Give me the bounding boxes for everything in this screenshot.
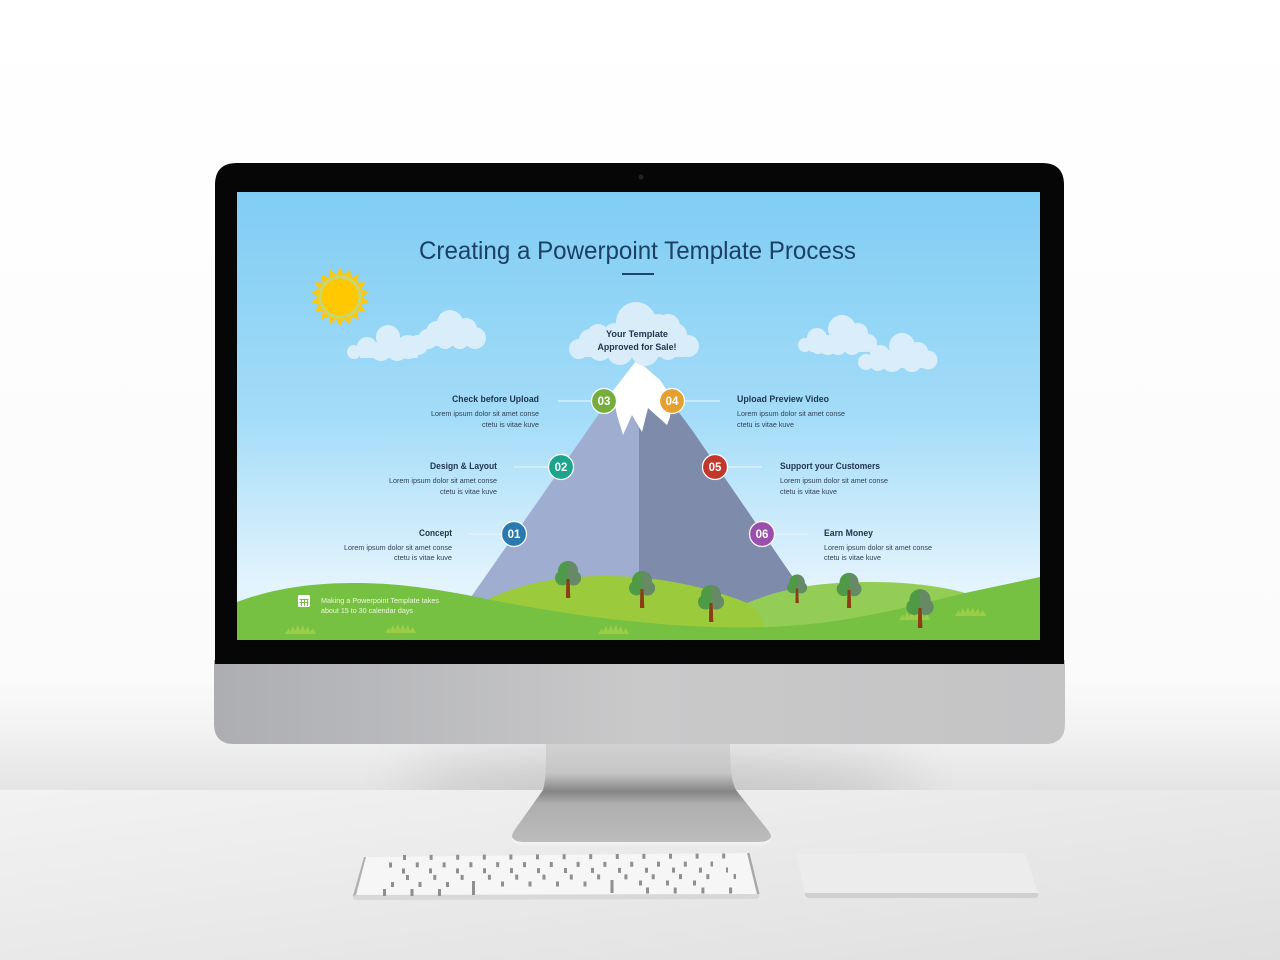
hill: middle <box>490 576 765 630</box>
step 02: Lorem ipsum dolor sit amet conse <box>389 476 497 485</box>
step 03: ctetu is vitae kuve <box>482 420 539 429</box>
grass tufts <box>285 607 986 634</box>
step 04: Lorem ipsum dolor sit amet conse <box>737 409 845 418</box>
cloud: left pair <box>347 310 486 361</box>
sky <box>237 192 1040 640</box>
summit cloud text: Your Template <box>606 329 668 340</box>
icon: sun <box>310 268 370 326</box>
step 05: Support your Customers <box>780 461 880 472</box>
step 05 <box>702 454 888 496</box>
hill: right <box>747 582 965 640</box>
step 04: Upload Preview Video <box>737 394 829 405</box>
step 01: ctetu is vitae kuve <box>394 553 452 562</box>
step 04 <box>660 388 845 429</box>
step 03: Lorem ipsum dolor sit amet conse <box>431 409 539 418</box>
monitor chin <box>214 660 1065 744</box>
duration note <box>321 596 439 615</box>
step 03: 03 <box>598 396 610 408</box>
step 01 <box>344 522 526 562</box>
step 02: 02 <box>555 462 567 474</box>
step 04: 04 <box>666 396 679 408</box>
cloud: summit: Approved for Sale! <box>598 342 676 353</box>
snow cap <box>612 361 672 435</box>
step 06 <box>750 522 932 562</box>
trees <box>555 561 934 628</box>
wall shadow behind stand <box>412 744 908 790</box>
step 02: Design & Layout <box>430 461 498 472</box>
monitor <box>214 163 1065 744</box>
step 01: Lorem ipsum dolor sit amet conse <box>344 543 452 552</box>
step 02 <box>389 454 574 496</box>
step 04: ctetu is vitae kuve <box>737 420 794 429</box>
step 01: 01 <box>508 529 521 541</box>
mountain left face <box>441 361 639 640</box>
step 03 <box>431 388 616 429</box>
title underline <box>622 273 654 275</box>
trackpad <box>797 853 1038 898</box>
icon: calendar <box>298 595 310 607</box>
step 05: Lorem ipsum dolor sit amet conse <box>780 476 888 485</box>
step 05: 05 <box>709 462 722 474</box>
step 01: Concept <box>419 528 453 539</box>
step 05: ctetu is vitae kuve <box>780 487 837 496</box>
desk surface <box>0 790 1280 960</box>
cloud: right pair <box>798 315 938 372</box>
camera <box>638 174 644 180</box>
duration note: about 15 to 30 calendar days <box>321 606 413 615</box>
step 03: Check before Upload <box>452 394 539 405</box>
duration note: Making a Powerpoint Template takes <box>321 596 439 605</box>
monitor stand <box>512 742 771 846</box>
slide screen <box>237 192 1040 640</box>
step 02: ctetu is vitae kuve <box>440 487 497 496</box>
mountain <box>441 361 836 640</box>
step 06: Earn Money <box>824 528 874 539</box>
step 06: 06 <box>756 529 768 541</box>
step 06: ctetu is vitae kuve <box>824 553 881 562</box>
hill: foreground <box>237 577 1040 640</box>
monitor bezel <box>215 163 1064 664</box>
mountain right face <box>636 361 836 640</box>
title: Creating a Powerpoint Template Process <box>419 237 856 265</box>
cloud: summit <box>569 302 699 366</box>
keyboard <box>353 853 760 900</box>
step 06: Lorem ipsum dolor sit amet conse <box>824 543 932 552</box>
